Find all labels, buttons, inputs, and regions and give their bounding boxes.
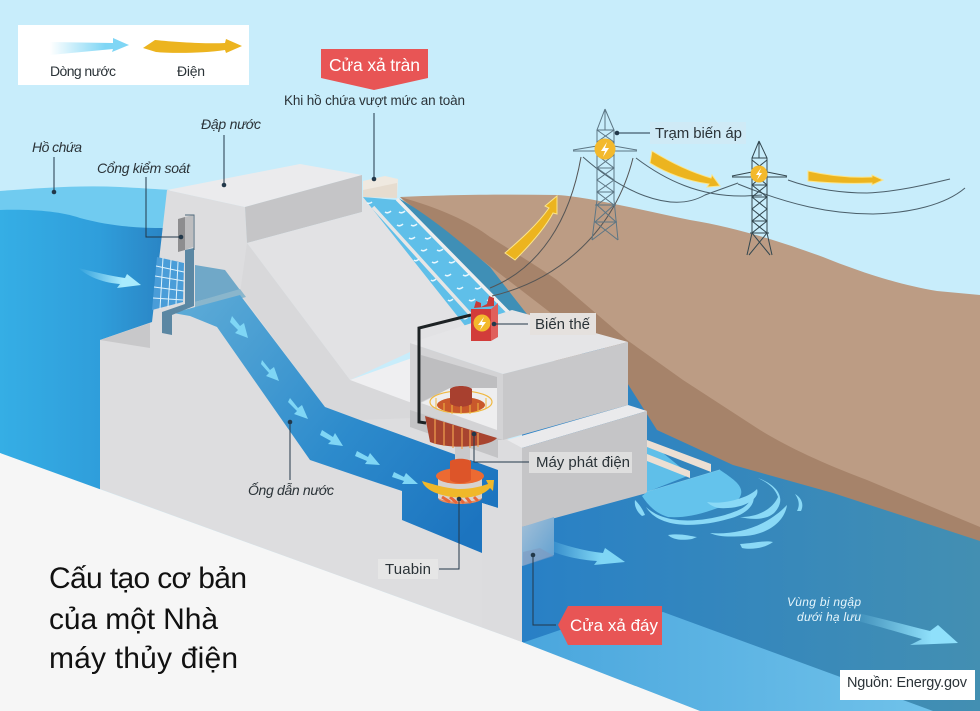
panel: power house — [410, 310, 647, 642]
exit pool edge — [647, 470, 720, 492]
label: dam — [201, 116, 261, 187]
title: máy thủy điện — [49, 642, 238, 675]
tower two — [732, 141, 787, 255]
slope side — [240, 243, 412, 420]
house interior floor — [421, 388, 497, 430]
central column — [482, 440, 522, 642]
tower one — [573, 109, 637, 240]
turbine blades — [442, 497, 478, 503]
swirl foam — [635, 478, 802, 549]
line: transformer to tower — [490, 157, 581, 288]
generator — [425, 386, 497, 449]
bottom outlet gate — [522, 517, 554, 566]
legend — [18, 25, 249, 85]
label: generator — [472, 432, 632, 473]
legend water arrow — [50, 38, 129, 55]
reservoir deep water — [0, 210, 165, 500]
spillway outer channel — [398, 198, 530, 325]
water swirl pool — [635, 470, 802, 549]
spillway ripples — [367, 202, 493, 319]
spillway gate front — [363, 183, 397, 198]
callout: bottom outlet — [531, 553, 662, 645]
house interior wall — [421, 355, 497, 402]
icon: tower lightning badge — [594, 138, 616, 160]
rotor hub — [450, 386, 472, 407]
water flow arrows — [78, 268, 958, 645]
line: span one upper — [583, 157, 738, 202]
stator ribs — [435, 419, 478, 449]
panel: dam structure — [100, 164, 522, 642]
intake screen — [152, 257, 184, 310]
callout: bottom outlet: Cửa xả đáy — [570, 616, 658, 635]
transformer terminals — [474, 296, 494, 308]
transformer front — [471, 309, 491, 341]
downstream river — [522, 340, 980, 711]
electricity arrows — [505, 151, 883, 260]
house front frame — [410, 343, 503, 440]
label: control gate: Cổng kiểm soát — [97, 160, 191, 176]
rotor ticks — [436, 398, 486, 414]
line: span one lower — [636, 158, 762, 196]
arrow: penstock 6 — [392, 472, 418, 484]
hillside land — [400, 195, 980, 560]
dam crest top — [167, 164, 362, 207]
label: substation: Trạm biến áp — [655, 125, 742, 142]
intake and penstock — [152, 215, 498, 553]
house right wall — [503, 342, 628, 440]
shaft — [455, 446, 470, 462]
gate column — [162, 248, 194, 335]
stator — [425, 416, 497, 447]
legend panel — [18, 25, 249, 85]
label: generator: Máy phát điện — [536, 454, 630, 471]
wing wall front — [522, 411, 647, 527]
exit rail upper — [647, 440, 711, 472]
label: turbine: Tuabin — [385, 561, 431, 578]
arrow: penstock 1 — [230, 316, 248, 338]
arrow: downstream flow — [853, 612, 958, 645]
arrow: electricity span two — [808, 171, 883, 185]
control gate — [178, 215, 194, 252]
callout badge — [558, 606, 662, 645]
label: downstream flooded area: dưới hạ lưu — [797, 610, 861, 624]
legend label water: Dòng nước — [50, 63, 116, 79]
spillway rails — [373, 207, 480, 325]
legend label electricity: Điện — [177, 63, 205, 79]
icon: tower lightning badge — [750, 166, 768, 182]
hillside shadow band — [400, 197, 980, 545]
arrow: turbine rotation — [422, 480, 494, 498]
exit rail lower — [647, 454, 690, 478]
generator chamber floor — [410, 410, 503, 458]
arrow: penstock 4 — [320, 430, 343, 446]
transformer — [471, 296, 498, 341]
title: của một Nhà — [49, 603, 218, 636]
spillway — [363, 176, 530, 332]
callout note: Khi hồ chứa vượt mức an toàn — [284, 93, 465, 108]
callout badge — [321, 49, 428, 90]
callout title: Cửa xả tràn — [329, 55, 420, 75]
label: transformer: Biến thế — [535, 316, 591, 333]
turbine — [422, 446, 494, 504]
icon: lightning badge — [474, 314, 490, 332]
dam crest front — [245, 175, 362, 243]
label: penstock — [248, 420, 334, 498]
arrow: penstock 2 — [261, 360, 279, 381]
arrow: electricity rising — [505, 196, 557, 260]
line: span two lower — [738, 184, 965, 214]
arrow: electricity span one — [650, 151, 720, 187]
label: control gate — [97, 160, 191, 239]
label: transformer — [492, 313, 596, 335]
spillway water — [363, 197, 518, 332]
spillway gate top — [363, 176, 398, 198]
wing wall top — [507, 405, 647, 448]
label: downstream flooded area — [787, 595, 861, 624]
source box: Nguồn: Energy.gov — [847, 675, 968, 691]
house roof — [410, 310, 628, 374]
label: dam: Đập nước — [201, 116, 261, 132]
title — [49, 562, 247, 675]
transformer side — [491, 303, 498, 341]
callout: spillway — [284, 49, 465, 181]
turbine drum — [438, 476, 482, 502]
shallow river edge — [522, 612, 933, 711]
slope base — [350, 358, 412, 405]
legend electricity arrow — [143, 39, 242, 53]
leader dot — [372, 177, 376, 181]
power lines — [490, 157, 965, 296]
arrow: penstock 5 — [355, 451, 380, 465]
bottom white corner — [0, 453, 700, 711]
label: reservoir: Hồ chứa — [32, 139, 82, 155]
line: transformer to tower second — [492, 158, 633, 296]
label: substation — [615, 122, 746, 144]
exit water — [647, 440, 690, 492]
title: Cấu tạo cơ bản — [49, 562, 247, 595]
leader — [373, 113, 375, 179]
turbine hub — [450, 459, 471, 483]
label: downstream flooded area: Vùng bị ngập — [787, 595, 861, 609]
turbine blades chamber — [438, 492, 482, 504]
reservoir back water — [0, 186, 170, 240]
spillway exit channel — [647, 440, 720, 492]
lower step — [100, 323, 150, 348]
power cable — [419, 315, 471, 423]
arrow: outlet flow — [545, 538, 625, 565]
arrow: penstock 3 — [288, 398, 308, 419]
arrow: reservoir inflow — [78, 268, 141, 288]
source box — [840, 670, 975, 700]
outlet gate floor — [523, 548, 554, 566]
label: reservoir — [32, 139, 82, 194]
downstream slope — [247, 197, 475, 380]
pool — [642, 470, 741, 517]
penstock water channel — [173, 295, 498, 553]
label: turbine — [378, 497, 461, 579]
dam lower body — [100, 190, 522, 642]
rotor ring — [430, 391, 492, 413]
line: span two upper — [788, 179, 950, 193]
label: penstock: Ống dẫn nước — [248, 481, 334, 498]
turbine disc — [436, 468, 484, 484]
intake ledge — [195, 289, 246, 311]
intake chamber — [195, 265, 240, 302]
rotor disc — [437, 397, 485, 413]
